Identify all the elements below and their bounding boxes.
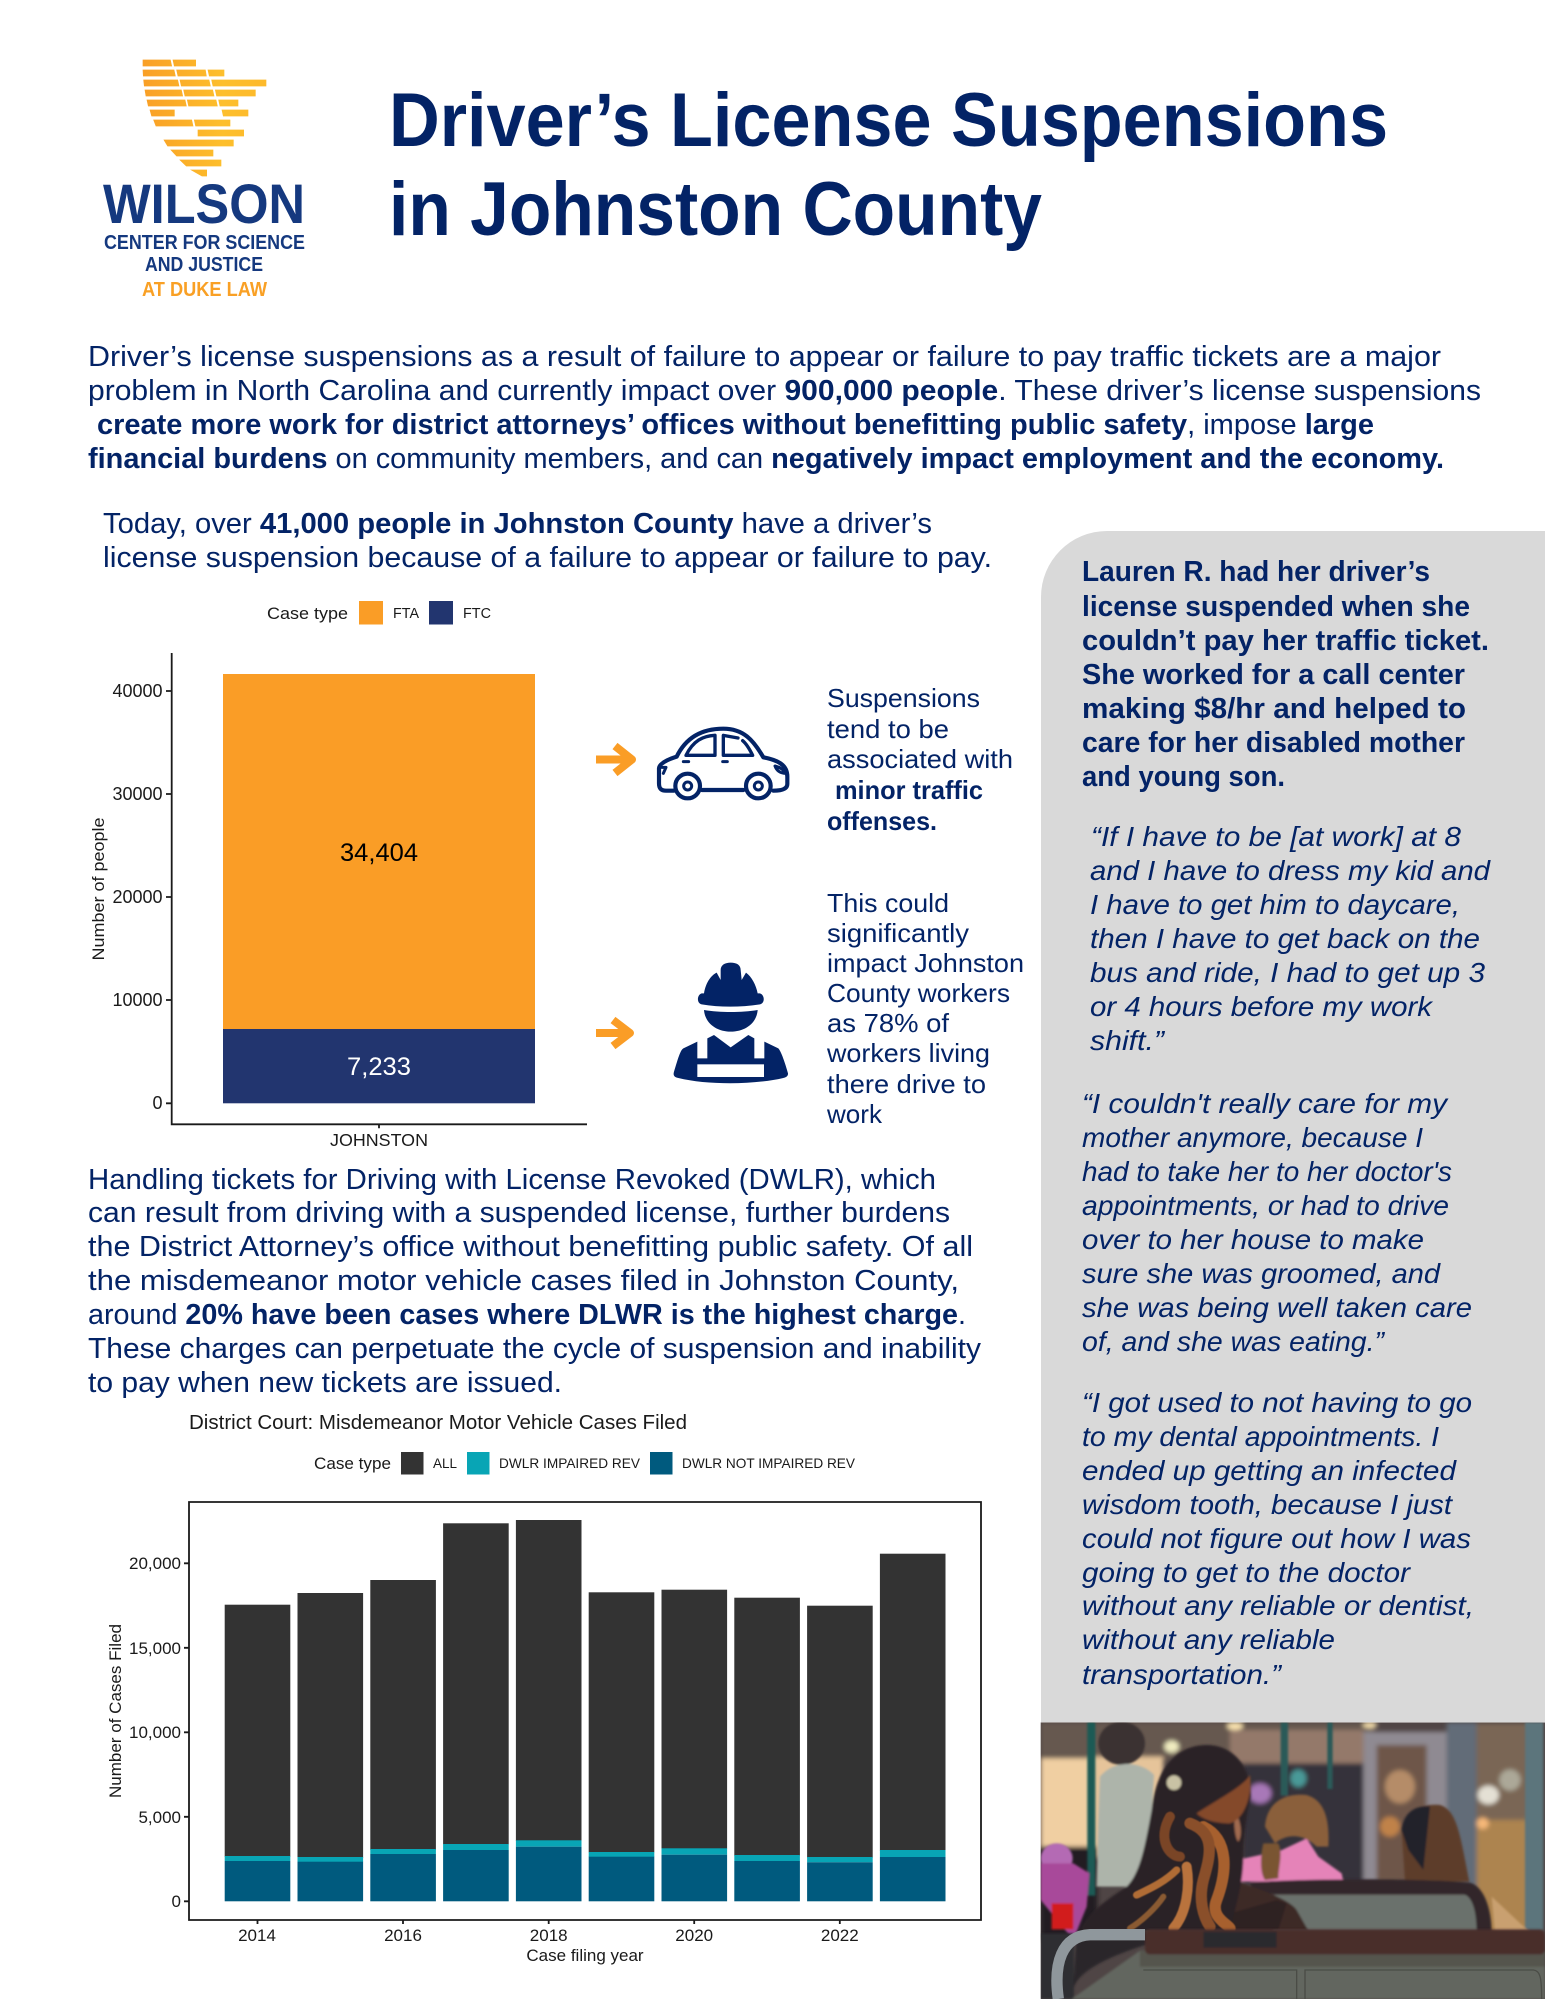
DWLR paragraph: to pay when new tickets are issued.: [88, 1367, 562, 1399]
legend: Case type: [314, 1454, 391, 1473]
quote 3: “I got used to not having to go: [1082, 1387, 1472, 1418]
intro paragraph: Driver’s license suspensions as a result of failure to appear or failure to pay traffic tickets are a major: [88, 341, 1442, 373]
y axis title: Number of people: [89, 818, 108, 960]
x axis title: Case filing year: [526, 1946, 644, 1965]
quote 2: she was being well taken care: [1082, 1292, 1472, 1323]
chart title: District Court: Misdemeanor Motor Vehicle Cases Filed: [189, 1412, 687, 1434]
story intro: care for her disabled mother: [1082, 727, 1465, 759]
y axis tick labels: 0: [172, 1892, 181, 1911]
icon: car: [659, 729, 787, 798]
bar value: FTA: 34,404: [340, 839, 418, 867]
text: commuting workers: This could: [827, 888, 949, 918]
quote 3: ended up getting an infected: [1082, 1455, 1458, 1486]
legend: DWLR NOT IMPAIRED REV: [682, 1455, 856, 1471]
quote 1: and I have to dress my kid and: [1090, 855, 1491, 886]
legend: [267, 601, 491, 624]
title: [389, 78, 1388, 252]
y axis tick labels: 40000: [112, 681, 162, 701]
plot frame and ticks: [184, 1502, 981, 1924]
text: commuting workers: workers living: [826, 1038, 990, 1068]
DWLR paragraph: Handling tickets for Driving with License Revoked (DWLR), which: [88, 1164, 936, 1196]
panel background: [1041, 531, 1545, 1722]
quote 2: “I couldn't really care for my: [1082, 1088, 1449, 1119]
quote 3: going to get to the doctor: [1082, 1557, 1412, 1588]
text: commuting workers: impact Johnston: [827, 948, 1024, 978]
bar segment: FTA: [223, 674, 535, 1029]
text: minor traffic offenses: Suspensions: [827, 683, 980, 713]
legend: [314, 1452, 856, 1474]
legend: FTA: [393, 605, 419, 622]
legend: Case type: [267, 604, 348, 623]
intro paragraph: [88, 341, 1481, 475]
quote 3: to my dental appointments. I: [1082, 1421, 1439, 1452]
y axis tick labels: 30000: [112, 784, 162, 804]
quote 2: had to take her to her doctor's: [1082, 1156, 1452, 1187]
story intro: Lauren R. had her driver’s: [1082, 556, 1430, 588]
y axis tick labels: 0: [152, 1093, 162, 1113]
DWLR paragraph: can result from driving with a suspended license, further burdens: [88, 1197, 950, 1229]
quote 3: [1082, 1387, 1474, 1690]
x axis tick labels: 2022: [821, 1926, 859, 1945]
quote 2: [1082, 1088, 1472, 1357]
quote 3: transportation.”: [1082, 1659, 1283, 1690]
x axis label: JOHNSTON: [330, 1130, 428, 1150]
intro paragraph: create more work for district attorneys’ offices without benefitting public safety , impose large: [97, 409, 1374, 441]
icon: construction worker: [674, 963, 788, 1083]
y axis tick labels: [129, 1554, 181, 1911]
y axis tick labels: 5,000: [138, 1808, 181, 1827]
stacked bar chart: suspensions by case type: [89, 601, 587, 1150]
quote 1: [1090, 821, 1491, 1056]
x axis tick labels: 2018: [530, 1926, 568, 1945]
legend: FTC: [463, 605, 491, 622]
bars: all cases: [225, 1520, 945, 1858]
arrow: to worker: [596, 1020, 630, 1046]
text: commuting workers: there drive to: [827, 1069, 986, 1099]
text: commuting workers: as 78% of: [827, 1008, 950, 1038]
text: commuting workers: work: [826, 1099, 883, 1129]
text: commuting workers: [826, 888, 1024, 1129]
quote 3: wisdom tooth, because I just: [1082, 1489, 1453, 1520]
DWLR paragraph: around 20% have been cases where DLWR is the highest charge.: [88, 1299, 966, 1331]
suspension count statement: [103, 508, 992, 574]
y axis tick labels: 10,000: [129, 1723, 181, 1742]
y axis title: Number of Cases Filed: [106, 1624, 125, 1798]
title: Driver’s License Suspensions: [389, 78, 1388, 163]
quote 2: sure she was groomed, and: [1082, 1258, 1441, 1289]
intro paragraph: problem in North Carolina and currently impact over 900,000 people . These driver’s license suspensions: [88, 375, 1481, 407]
story intro: couldn’t pay her traffic ticket.: [1082, 625, 1489, 657]
quote 2: over to her house to make: [1082, 1224, 1424, 1255]
text: minor traffic offenses: tend to be: [827, 714, 949, 744]
story intro: [1082, 556, 1489, 793]
legend: DWLR IMPAIRED REV: [499, 1455, 641, 1471]
y axis tick labels: 15,000: [129, 1639, 181, 1658]
quote 3: without any reliable: [1082, 1624, 1335, 1655]
text: commuting workers: significantly: [827, 918, 969, 948]
photo: woman riding a bus: [1041, 1722, 1545, 1999]
quote 3: could not figure out how I was: [1082, 1523, 1471, 1554]
logo subtitle line 3: AT DUKE LAW: [142, 278, 268, 301]
quote 2: appointments, or had to drive: [1082, 1190, 1449, 1221]
quote 1: or 4 hours before my work: [1090, 991, 1434, 1022]
x axis tick labels: 2014: [238, 1926, 276, 1945]
logo subtitle line 2: AND JUSTICE: [145, 253, 263, 276]
bar value: FTC: 7,233: [347, 1053, 411, 1081]
quote 2: mother anymore, because I: [1082, 1122, 1423, 1153]
bars: DWLR impaired revocation: [225, 1840, 945, 1862]
y axis tick labels: 20000: [112, 887, 162, 907]
text: minor traffic offenses: minor traffic: [835, 775, 983, 805]
story intro: license suspended when she: [1082, 591, 1470, 623]
suspension count statement: license suspension because of a failure to appear or failure to pay.: [103, 542, 992, 574]
intro paragraph: financial burdens on community members, and can negatively impact employment and the economy.: [88, 443, 1444, 475]
y axis tick labels: 20,000: [129, 1554, 181, 1573]
bar segment: FTC: [223, 1029, 535, 1103]
DWLR paragraph: These charges can perpetuate the cycle of suspension and inability: [88, 1333, 982, 1365]
logo: Wilson Center: [103, 60, 305, 301]
text: minor traffic offenses: [827, 683, 1013, 836]
y axis tick labels: 10000: [112, 990, 162, 1010]
text: minor traffic offenses: associated with: [827, 744, 1013, 774]
y axis tick labels: [112, 681, 162, 1113]
quote 1: “If I have to be [at work] at 8: [1091, 821, 1461, 852]
story intro: making $8/hr and helped to: [1082, 693, 1466, 725]
text: commuting workers: County workers: [827, 978, 1010, 1008]
DWLR paragraph: [88, 1164, 982, 1399]
logo wordmark: WILSON: [103, 172, 305, 235]
bars: DWLR not impaired revocation: [225, 1847, 945, 1901]
bar chart: misdemeanor motor vehicle cases filed: [106, 1412, 981, 1965]
x axis tick labels: 2016: [384, 1926, 422, 1945]
legend: ALL: [433, 1455, 457, 1471]
DWLR paragraph: the District Attorney’s office without benefitting public safety. Of all: [88, 1231, 973, 1263]
story intro: and young son.: [1082, 761, 1285, 793]
quote 1: shift.”: [1090, 1025, 1166, 1056]
x axis tick labels: [238, 1926, 859, 1945]
DWLR paragraph: the misdemeanor motor vehicle cases filed in Johnston County,: [88, 1265, 959, 1297]
logo subtitle line 1: CENTER FOR SCIENCE: [104, 231, 305, 254]
quote 1: bus and ride, I had to get up 3: [1090, 957, 1485, 988]
quote 1: then I have to get back on the: [1090, 923, 1480, 954]
quote 3: without any reliable or dentist,: [1082, 1590, 1474, 1621]
quote 1: I have to get him to daycare,: [1090, 889, 1460, 920]
text: minor traffic offenses: offenses.: [827, 806, 937, 836]
arrow: to car: [596, 746, 632, 773]
x axis tick labels: 2020: [675, 1926, 713, 1945]
title: in Johnston County: [389, 167, 1042, 252]
panel: Lauren R. story: [1041, 531, 1545, 1722]
suspension count statement: Today, over 41,000 people in Johnston County have a driver’s: [103, 508, 932, 540]
quote 2: of, and she was eating.”: [1082, 1326, 1386, 1357]
logo mark: striped map shape: [143, 60, 266, 176]
story intro: She worked for a call center: [1082, 659, 1465, 691]
axes: [166, 653, 587, 1128]
